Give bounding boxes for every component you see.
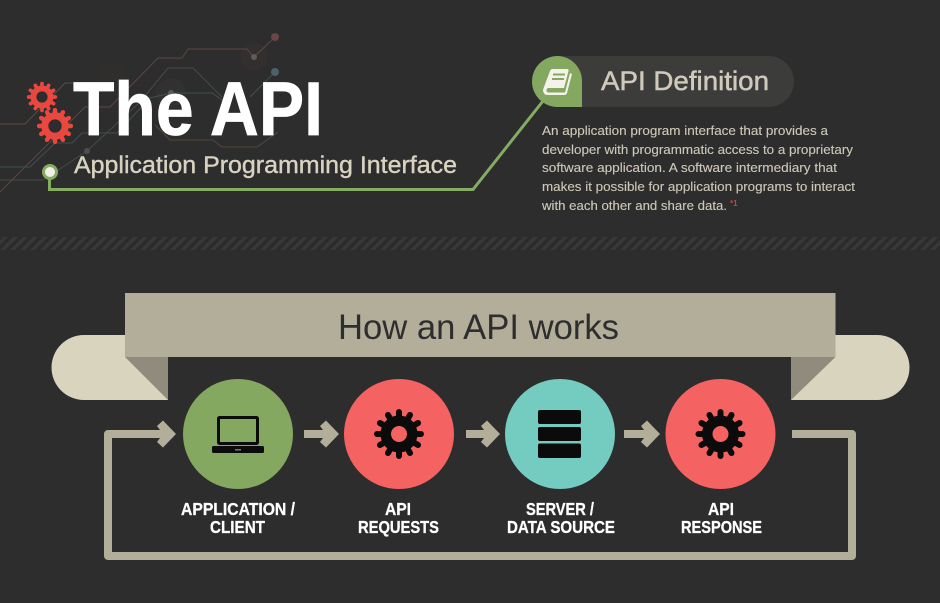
green connector line bbox=[44, 101, 543, 190]
definition text: software application. A software intermediary that bbox=[542, 160, 837, 175]
ribbon left fold bbox=[125, 357, 168, 400]
step: api response bbox=[666, 379, 776, 537]
icon: black gear bbox=[377, 412, 421, 456]
striped divider band bbox=[0, 237, 940, 250]
icon: server stack bbox=[538, 410, 581, 458]
definition text: developer with programmatic access to a proprietary bbox=[542, 142, 854, 157]
subtitle: Application Programming Interface bbox=[74, 152, 457, 179]
arrow: requests to server bbox=[466, 420, 500, 448]
ribbon left tail bbox=[52, 335, 168, 400]
definition text: *1 bbox=[730, 199, 738, 208]
icon: green badge with book bbox=[532, 56, 582, 107]
label bbox=[358, 499, 439, 537]
label: API bbox=[708, 499, 734, 519]
title: The API bbox=[73, 67, 323, 152]
definition text: makes it possible for application programs to interact bbox=[542, 179, 855, 194]
definition text: with each other and share data. bbox=[541, 198, 727, 213]
label: DATA SOURCE bbox=[507, 517, 615, 537]
step: application / client bbox=[181, 379, 295, 537]
heading: API Definition: API Definition bbox=[601, 66, 769, 96]
feedback loop arrow bbox=[108, 420, 852, 556]
panel: ribbon banner bbox=[125, 293, 836, 357]
panel: API definition pill bbox=[532, 56, 794, 107]
label: REQUESTS bbox=[358, 517, 439, 537]
label: SERVER / bbox=[526, 499, 594, 519]
ribbon right tail bbox=[791, 335, 910, 400]
label: CLIENT bbox=[210, 517, 265, 537]
step: api requests bbox=[344, 379, 454, 537]
heading: How an API works: How an API works bbox=[338, 308, 619, 347]
label: APPLICATION / bbox=[181, 499, 295, 519]
label bbox=[507, 499, 615, 537]
arrow: server to response bbox=[624, 420, 660, 448]
arrow: client to requests bbox=[304, 420, 339, 448]
label: RESPONSE bbox=[681, 517, 762, 537]
definition text bbox=[541, 123, 855, 213]
label bbox=[181, 499, 295, 537]
icon: laptop bbox=[212, 418, 264, 453]
icon: red gears bbox=[29, 84, 71, 142]
step: server / data source bbox=[505, 379, 615, 537]
definition text: An application program interface that provides a bbox=[542, 123, 829, 138]
circuit background bbox=[0, 33, 279, 192]
icon: black gear bbox=[698, 412, 742, 456]
ribbon right fold bbox=[791, 357, 836, 400]
label bbox=[681, 499, 762, 537]
label: API bbox=[385, 499, 411, 519]
